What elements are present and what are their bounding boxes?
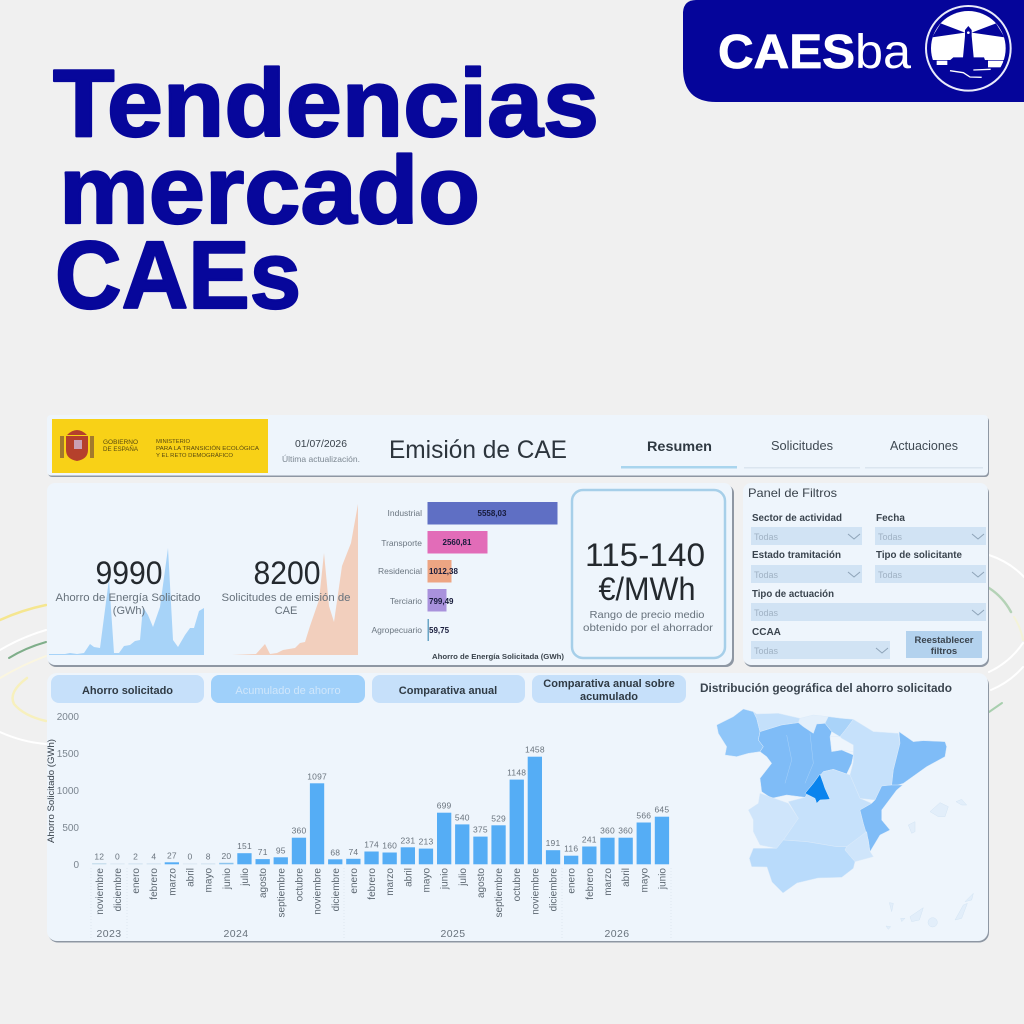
- bar value labels: 213: [419, 837, 433, 847]
- KPI: energy saved: (GWh): [113, 605, 145, 617]
- tabs: [621, 439, 983, 468]
- bar value labels: 645: [655, 805, 669, 815]
- bar value labels: 2: [133, 852, 138, 862]
- year axis labels: [91, 868, 671, 940]
- logo: CAESba badge: CAES: [718, 26, 855, 79]
- filter: applicant: [875, 550, 986, 583]
- bar value labels: 1148: [507, 768, 526, 778]
- bar value labels: 0: [115, 852, 120, 862]
- dashboard heading: Emisión de CAE: [389, 436, 567, 464]
- month axis labels: septiembre: [494, 868, 505, 917]
- title: CAEs: [55, 222, 301, 329]
- bar value labels: 566: [636, 810, 651, 820]
- filter: action type: [751, 589, 986, 621]
- bar value labels: 540: [455, 812, 470, 822]
- card: price range: Rango de precio medio: [590, 609, 705, 621]
- bar value labels: 95: [276, 845, 286, 855]
- bar value labels: 360: [600, 826, 615, 836]
- bar value labels: 160: [382, 840, 397, 850]
- month axis labels: junio: [658, 868, 668, 890]
- month axis labels: agosto: [476, 868, 487, 898]
- month axis labels: marzo: [385, 868, 396, 896]
- month axis labels: enero: [131, 868, 142, 894]
- logo: Gobierno de España: [52, 419, 268, 473]
- bar value labels: 151: [237, 841, 252, 851]
- bar value labels: 360: [292, 826, 306, 836]
- bar value labels: 1097: [307, 771, 327, 781]
- month axis labels: diciembre: [113, 868, 124, 911]
- button: reset filters: filtros: [931, 646, 957, 657]
- month axis labels: octubre: [512, 868, 523, 901]
- card: price range: [572, 490, 725, 658]
- filters heading: Panel de Filtros: [748, 486, 837, 500]
- month axis labels: julio: [458, 868, 469, 887]
- tabs: Resumen: [647, 439, 712, 454]
- panel: header: [47, 415, 989, 477]
- KPI: energy saved: Ahorro de Energía Solicitado: [56, 592, 200, 604]
- bar value labels: 8: [206, 852, 211, 862]
- year axis labels: 2026: [605, 928, 629, 940]
- bar value labels: 0: [188, 852, 193, 862]
- filter: date: Todas: [878, 532, 903, 542]
- bar chart: sector: 1012,38: [429, 567, 458, 576]
- filter: date: Fecha: [876, 513, 905, 524]
- logo: Gobierno de España: MINISTERIO: [156, 439, 191, 445]
- panel: KPIs: [47, 483, 734, 667]
- buttons: chart selector: Ahorro solicitado: [82, 685, 173, 697]
- title: Tendencias: [53, 50, 599, 157]
- filter: sector: Todas: [754, 532, 779, 542]
- bar chart: sector: Terciario: [390, 596, 422, 606]
- button: reset filters: Reestablecer: [914, 635, 974, 646]
- bar chart: sector: 2560,81: [443, 538, 472, 547]
- bar value labels: 27: [167, 850, 177, 860]
- card: price range: €/MWh: [598, 571, 696, 607]
- month axis labels: mayo: [640, 868, 650, 892]
- buttons: chart selector: acumulado: [580, 691, 638, 703]
- bar chart: sector: [371, 502, 565, 661]
- bar chart: sector: 59,75: [429, 626, 450, 635]
- bar chart: sector: Residencial: [378, 566, 422, 576]
- bar value labels: 12: [94, 852, 104, 862]
- KPI: energy saved: [56, 555, 200, 617]
- month axis labels: mayo: [204, 868, 214, 892]
- filter: region: Todas: [754, 646, 779, 656]
- update date: 01/07/2026: [295, 439, 347, 450]
- bar value labels: [94, 745, 669, 862]
- bar value labels: 241: [582, 834, 597, 844]
- month axis labels: febrero: [585, 868, 596, 900]
- month axis labels: junio: [440, 868, 450, 890]
- KPI: requests: Solicitudes de emisión de: [222, 592, 350, 604]
- filter: applicant: Tipo de solicitante: [876, 550, 962, 561]
- y axis: 0: [73, 860, 79, 871]
- buttons: chart selector: Comparativa anual: [399, 685, 497, 697]
- month axis labels: agosto: [258, 868, 269, 898]
- month axis labels: [95, 868, 668, 917]
- bar value labels: 20: [221, 851, 231, 861]
- month axis labels: marzo: [168, 868, 178, 896]
- card: price range: 115-140: [585, 537, 705, 573]
- bar chart: sector: Transporte: [381, 538, 422, 548]
- year axis labels: 2024: [224, 928, 248, 940]
- month axis labels: marzo: [603, 868, 614, 896]
- filter: action type: Todas: [754, 608, 779, 618]
- panel: monthly chart and map: [46, 673, 989, 942]
- bar value labels: 360: [618, 826, 633, 836]
- month axis labels: junio: [222, 868, 233, 890]
- area chart: solicitudes: [232, 504, 358, 655]
- filter: status: Todas: [754, 570, 779, 580]
- filter: applicant: Todas: [878, 570, 903, 580]
- bar value labels: 74: [348, 847, 358, 857]
- month axis labels: enero: [566, 868, 578, 894]
- logo: Gobierno de España: GOBIERNO: [103, 440, 138, 446]
- tabs: Actuaciones: [890, 439, 958, 453]
- month axis labels: diciembre: [548, 868, 560, 911]
- buttons: chart selector: Comparativa anual sobre: [543, 678, 675, 690]
- logo: Gobierno de España: PARA LA TRANSICIÓN ECOLÓGICA: [156, 445, 259, 452]
- bar value labels: 191: [546, 838, 560, 848]
- bar chart: sector: 799,49: [429, 597, 454, 606]
- card: price range: obtenido por el ahorrador: [583, 622, 714, 634]
- panel: filters: [743, 483, 989, 667]
- bar value labels: 699: [437, 801, 452, 811]
- map: Spain choropleth: [717, 709, 973, 929]
- buttons: chart selector: Acumulado de ahorro: [235, 685, 341, 697]
- bar value labels: 231: [401, 835, 415, 845]
- bar chart: monthly savings: [92, 757, 669, 864]
- filter: sector: Sector de actividad: [752, 513, 842, 524]
- filter: region: CCAA: [752, 627, 781, 638]
- title: [53, 50, 599, 329]
- bar value labels: 375: [473, 825, 488, 835]
- bar value labels: 68: [330, 847, 340, 857]
- filter: action type: Tipo de actuación: [752, 589, 834, 600]
- month axis labels: diciembre: [331, 868, 342, 911]
- bar chart: sector: Agropecuario: [371, 625, 422, 635]
- y axis: 500: [62, 823, 79, 834]
- logo: CAESba badge: [683, 0, 1024, 102]
- KPI: requests: 8200: [254, 555, 320, 591]
- filter: date: [875, 513, 986, 545]
- icon: lighthouse: [926, 6, 1011, 93]
- year axis labels: 2025: [441, 928, 465, 940]
- month axis labels: enero: [349, 868, 360, 894]
- map: islands: [886, 799, 973, 929]
- month axis labels: febrero: [367, 868, 378, 900]
- bar value labels: 1458: [525, 745, 545, 755]
- title: mercado: [59, 137, 480, 244]
- map heading: Distribución geográfica del ahorro solicitado: [700, 681, 952, 695]
- bar value labels: 529: [491, 813, 506, 823]
- y axis: 1500: [57, 749, 79, 760]
- KPI: requests: [222, 555, 350, 617]
- bar value labels: 174: [364, 840, 379, 850]
- KPI: requests: CAE: [275, 605, 297, 617]
- area chart: ahorro: [49, 548, 204, 655]
- filter: status: Estado tramitación: [752, 550, 841, 561]
- y axis: [46, 712, 79, 871]
- y axis: Ahorro Solicitado (GWh): [46, 739, 57, 843]
- bar value labels: 116: [564, 844, 578, 854]
- month axis labels: noviembre: [530, 868, 542, 915]
- tabs: Solicitudes: [771, 439, 833, 453]
- button: reset filters: [906, 631, 982, 658]
- logo: CAESba badge: ba: [855, 26, 911, 79]
- update date: Última actualización.: [282, 454, 360, 464]
- month axis labels: mayo: [422, 868, 432, 892]
- month axis labels: febrero: [149, 868, 160, 900]
- KPI: energy saved: 9990: [96, 555, 162, 591]
- logo: Gobierno de España: Y EL RETO DEMOGRÁFICO: [156, 452, 234, 459]
- bar chart: sector: Industrial: [388, 508, 422, 518]
- month axis labels: noviembre: [95, 868, 106, 915]
- buttons: chart selector: [51, 675, 686, 703]
- month axis labels: octubre: [294, 868, 306, 901]
- background arcs: [0, 555, 1024, 744]
- filter: sector: [751, 513, 862, 545]
- bar chart: sector: 5558,03: [478, 509, 507, 518]
- year axis labels: 2023: [97, 928, 121, 940]
- bar value labels: 4: [151, 852, 156, 862]
- bar chart: sector: Ahorro de Energía Solicitada (GWh): [432, 652, 565, 661]
- filter: region: [751, 627, 890, 659]
- filter: status: [751, 550, 862, 583]
- month axis labels: noviembre: [312, 868, 324, 915]
- month axis labels: abril: [186, 868, 196, 887]
- month axis labels: julio: [240, 868, 251, 887]
- y axis: 2000: [57, 712, 79, 723]
- month axis labels: septiembre: [276, 868, 288, 917]
- month axis labels: abril: [621, 868, 632, 887]
- month axis labels: abril: [404, 868, 414, 887]
- y axis: 1000: [57, 786, 79, 797]
- logo: Gobierno de España: DE ESPAÑA: [103, 446, 138, 453]
- bar value labels: 71: [258, 847, 268, 857]
- update date: [282, 439, 360, 464]
